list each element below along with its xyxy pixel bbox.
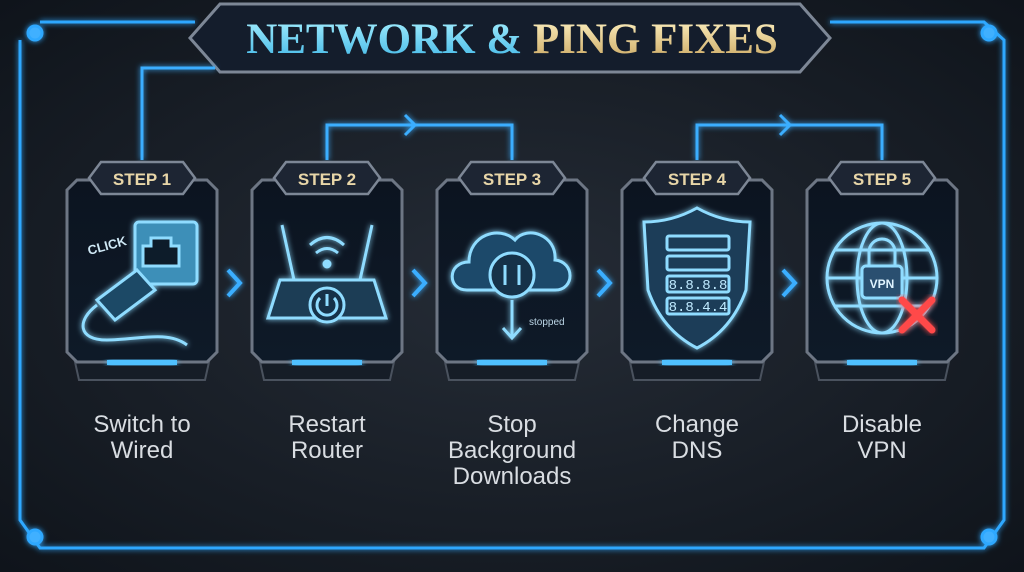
title banner: NETWORK & PING FIXES: [246, 16, 778, 63]
step card 4: 8.8.8.8: [669, 278, 727, 294]
labels: Background: [448, 437, 576, 464]
labels: Switch to: [93, 411, 191, 438]
step card 1: [67, 162, 217, 380]
step card 1: CLICK: [86, 233, 129, 258]
labels: Restart: [288, 411, 366, 438]
labels: Change: [655, 411, 739, 438]
title banner: [190, 4, 830, 72]
step card 1: STEP 1: [113, 170, 171, 189]
labels: DNS: [672, 437, 722, 464]
step card 3: [437, 162, 587, 380]
step card 4: 8.8.4.4: [669, 300, 727, 316]
arrows between cards: [228, 270, 795, 296]
labels: [93, 411, 922, 490]
step card 4: STEP 4: [668, 170, 727, 189]
step card 5: [807, 162, 957, 380]
labels: Router: [291, 437, 363, 464]
step card 2: [252, 162, 402, 380]
step card 3: stopped: [529, 317, 565, 328]
labels: Disable: [842, 411, 922, 438]
step card 5: STEP 5: [853, 170, 911, 189]
labels: VPN: [857, 437, 907, 464]
step card 3: STEP 3: [483, 170, 541, 189]
step card 4: [622, 162, 772, 380]
labels: Stop: [487, 411, 537, 438]
connectors: [142, 68, 882, 160]
step card 5: VPN: [870, 277, 894, 291]
labels: Downloads: [453, 463, 571, 490]
step card 2: STEP 2: [298, 170, 356, 189]
labels: Wired: [111, 437, 173, 464]
